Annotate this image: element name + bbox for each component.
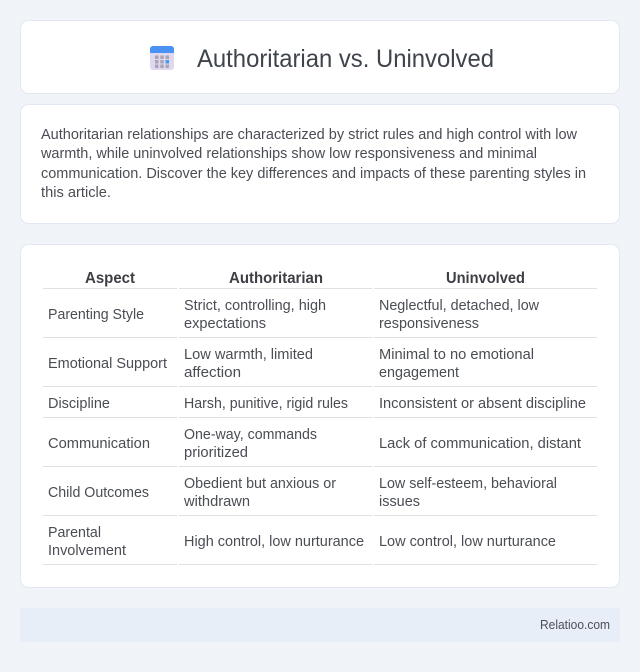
footer xyxy=(20,608,620,642)
table header: Aspect xyxy=(85,270,135,287)
row: emotional support: Minimal to no emotional xyxy=(379,347,534,363)
row: child outcomes: Child Outcomes xyxy=(48,485,149,501)
row: child outcomes: issues xyxy=(379,494,420,510)
row: child outcomes: withdrawn xyxy=(183,494,250,510)
text block: introduction: this article. xyxy=(41,185,111,201)
icon: calendar xyxy=(150,46,174,70)
row: emotional support: Low warmth, limited xyxy=(184,347,313,363)
footer brand text: Relatioo.com xyxy=(540,618,610,632)
table header: Uninvolved xyxy=(446,270,525,287)
row: communication: Lack of communication, distant xyxy=(379,436,581,452)
panel: introduction xyxy=(20,104,620,224)
table header: Authoritarian xyxy=(229,270,323,287)
row: child outcomes: Low self-esteem, behavioral xyxy=(379,476,557,492)
row: parenting style: Strict, controlling, high xyxy=(184,298,326,314)
row: communication: Communication xyxy=(48,436,150,452)
title: Authoritarian vs. Uninvolved xyxy=(197,45,494,73)
table header xyxy=(85,270,525,287)
text block: introduction: communication. Discover the key differences and impacts of these parenting styles in xyxy=(41,166,586,182)
row: communication xyxy=(48,427,581,461)
row: discipline: Harsh, punitive, rigid rules xyxy=(184,396,348,412)
row: discipline: Inconsistent or absent discipline xyxy=(379,396,586,412)
row: parental involvement: High control, low nurturance xyxy=(184,534,364,550)
row: discipline xyxy=(48,396,586,412)
row: emotional support: Emotional Support xyxy=(48,356,167,372)
row: parental involvement xyxy=(48,525,556,559)
row: parenting style: responsiveness xyxy=(379,316,479,332)
row: parental involvement: Low control, low nurturance xyxy=(379,534,556,550)
row: parenting style xyxy=(48,298,540,332)
panel: comparison table xyxy=(20,244,620,588)
row: communication: prioritized xyxy=(184,445,248,461)
text block: introduction: Authoritarian relationships are characterized by strict rules and high control with low xyxy=(41,127,578,143)
row: parental involvement: Involvement xyxy=(48,543,126,559)
row: parenting style: Parenting Style xyxy=(48,307,144,323)
row: parental involvement: Parental xyxy=(48,525,101,541)
text block: introduction: warmth, while uninvolved relationships show low responsiveness and minimal xyxy=(40,146,537,162)
text block: introduction xyxy=(40,127,586,201)
row: parenting style: expectations xyxy=(184,316,266,332)
row: emotional support: affection xyxy=(184,365,241,381)
row: parenting style: Neglectful, detached, low xyxy=(379,298,540,314)
row: child outcomes xyxy=(48,476,557,510)
panel: title card xyxy=(20,20,620,94)
row: emotional support: engagement xyxy=(379,365,459,381)
row: child outcomes: Obedient but anxious or xyxy=(184,476,336,492)
row: discipline: Discipline xyxy=(48,396,110,412)
row: communication: One-way, commands xyxy=(184,427,317,443)
row: emotional support xyxy=(48,347,534,381)
